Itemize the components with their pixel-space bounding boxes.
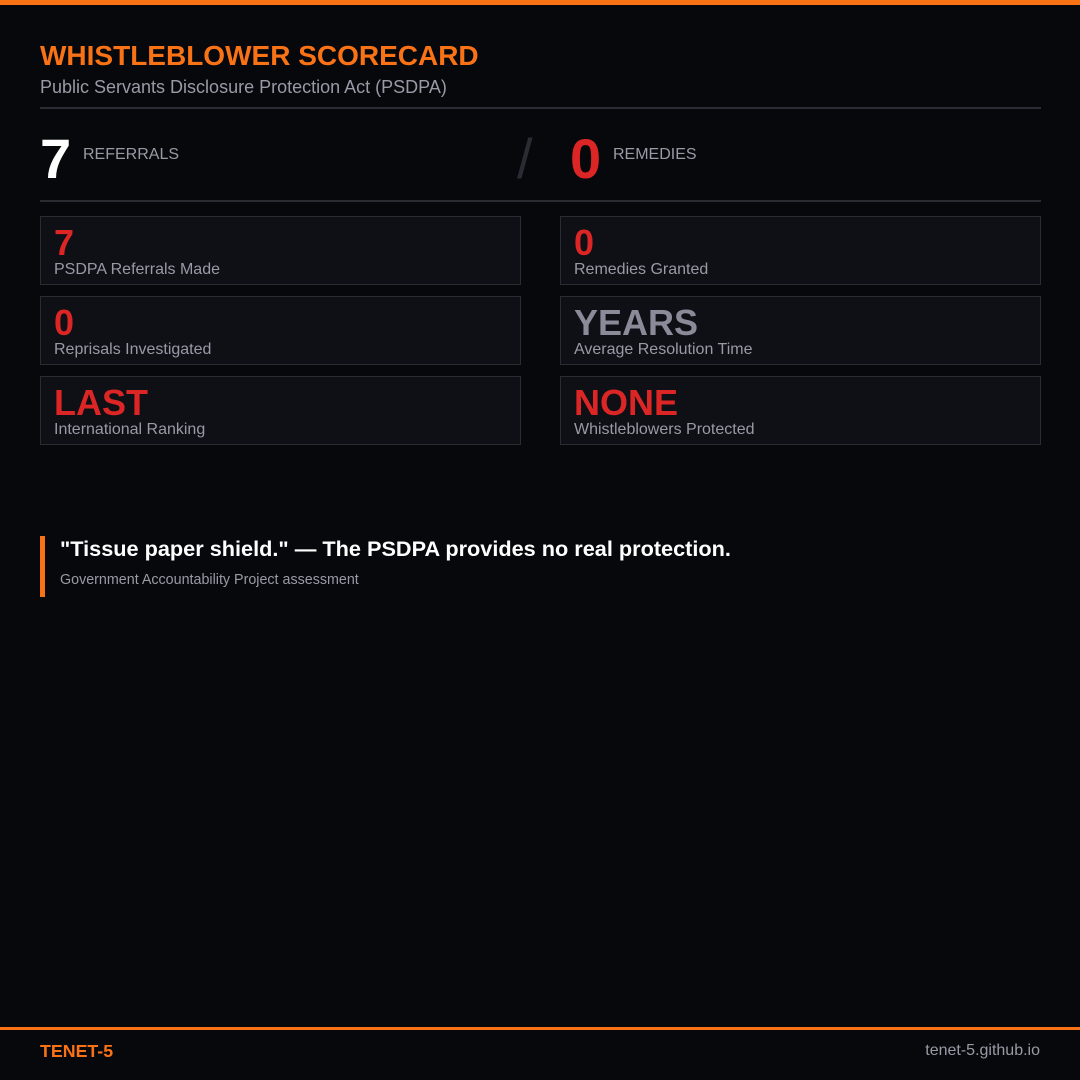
headline: remedies — [570, 127, 697, 190]
card: reprisals investigated: Reprisals Investigated — [54, 341, 211, 358]
card: protected — [560, 376, 1041, 445]
card: resolution time: Average Resolution Time — [574, 341, 752, 358]
card: referrals made: 7 — [54, 222, 74, 263]
quote block: Government Accountability Project assessment — [60, 572, 359, 588]
card: remedies granted: 0 — [574, 222, 594, 263]
slash divider: / — [517, 127, 533, 190]
card: referrals made — [40, 216, 521, 285]
card: resolution time: YEARS — [574, 302, 698, 343]
card: remedies granted — [560, 216, 1041, 285]
card: referrals made: PSDPA Referrals Made — [54, 261, 220, 278]
headline: referrals: 7 — [40, 127, 71, 190]
footer brand: TENET-5 — [40, 1041, 113, 1061]
subtitle: Public Servants Disclosure Protection Act (PSDPA) — [40, 77, 447, 97]
card: resolution time — [560, 296, 1041, 365]
quote block — [40, 536, 800, 597]
headline: referrals: REFERRALS — [83, 146, 179, 163]
card: ranking: International Ranking — [54, 421, 205, 438]
card: ranking: LAST — [54, 382, 148, 423]
headline: remedies: REMEDIES — [613, 146, 697, 163]
footer url: tenet-5.github.io — [925, 1042, 1040, 1059]
card: protected: Whistleblowers Protected — [574, 421, 755, 438]
card: ranking — [40, 376, 521, 445]
headline: remedies: 0 — [570, 127, 601, 190]
card: reprisals investigated — [40, 296, 521, 365]
card: protected: NONE — [574, 382, 678, 423]
title: WHISTLEBLOWER SCORECARD — [40, 40, 479, 71]
card: remedies granted: Remedies Granted — [574, 261, 708, 278]
headline: referrals — [40, 127, 179, 190]
quote block: "Tissue paper shield." — The PSDPA provides no real protection. — [60, 536, 731, 561]
card: reprisals investigated: 0 — [54, 302, 74, 343]
